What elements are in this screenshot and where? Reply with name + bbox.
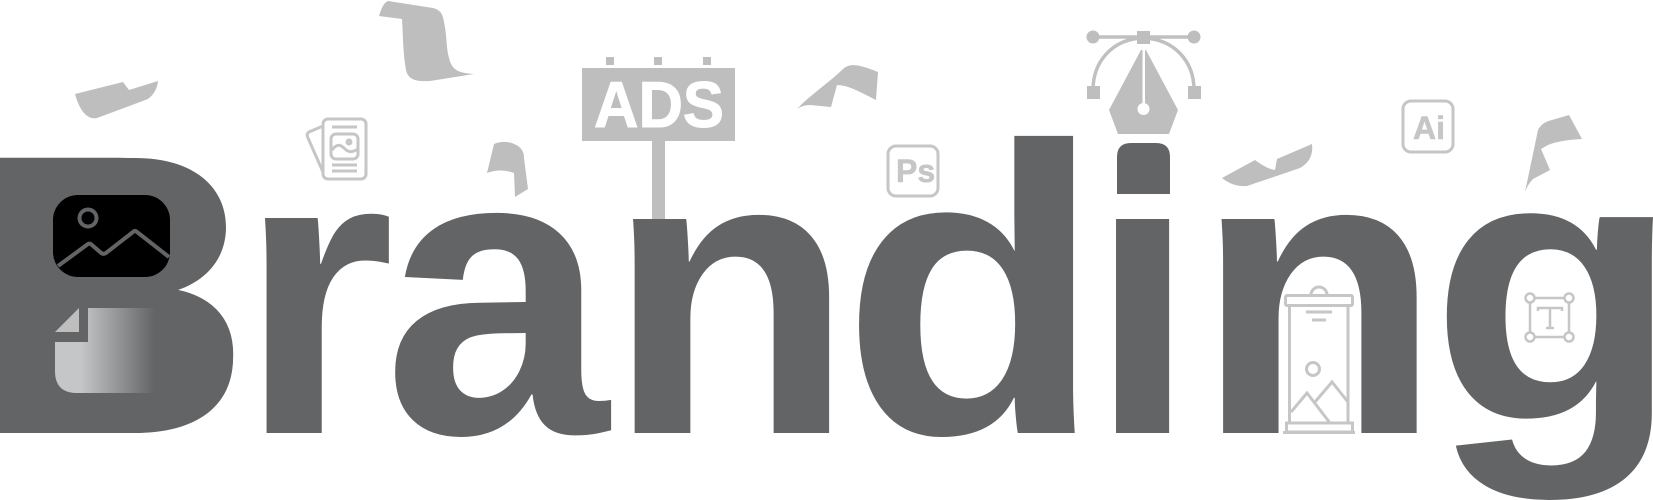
paper scrap 4	[797, 65, 878, 109]
icon: Photoshop badge: Ps	[896, 153, 935, 189]
paper scrap 1	[75, 81, 158, 118]
billboard label: ADS	[594, 68, 724, 141]
icon: text box	[1526, 294, 1574, 342]
icon: image in B	[53, 195, 170, 277]
i dot	[1112, 136, 1176, 198]
icon: roll-up banner	[1283, 287, 1355, 432]
billboard	[582, 57, 735, 221]
icon: Illustrator badge	[1403, 101, 1453, 152]
paper scrap 5	[1222, 144, 1312, 186]
paper scrap 3	[487, 142, 528, 197]
icon: pen tool	[1086, 30, 1201, 134]
icon: document in B	[55, 308, 157, 393]
icon: Photoshop badge	[888, 146, 938, 196]
paper scrap 6	[1525, 115, 1582, 192]
icon: Illustrator badge: Ai	[1413, 110, 1445, 146]
icon: poster cards	[307, 119, 366, 179]
paper scrap 2	[379, 1, 474, 81]
B lobes filled	[40, 158, 233, 433]
